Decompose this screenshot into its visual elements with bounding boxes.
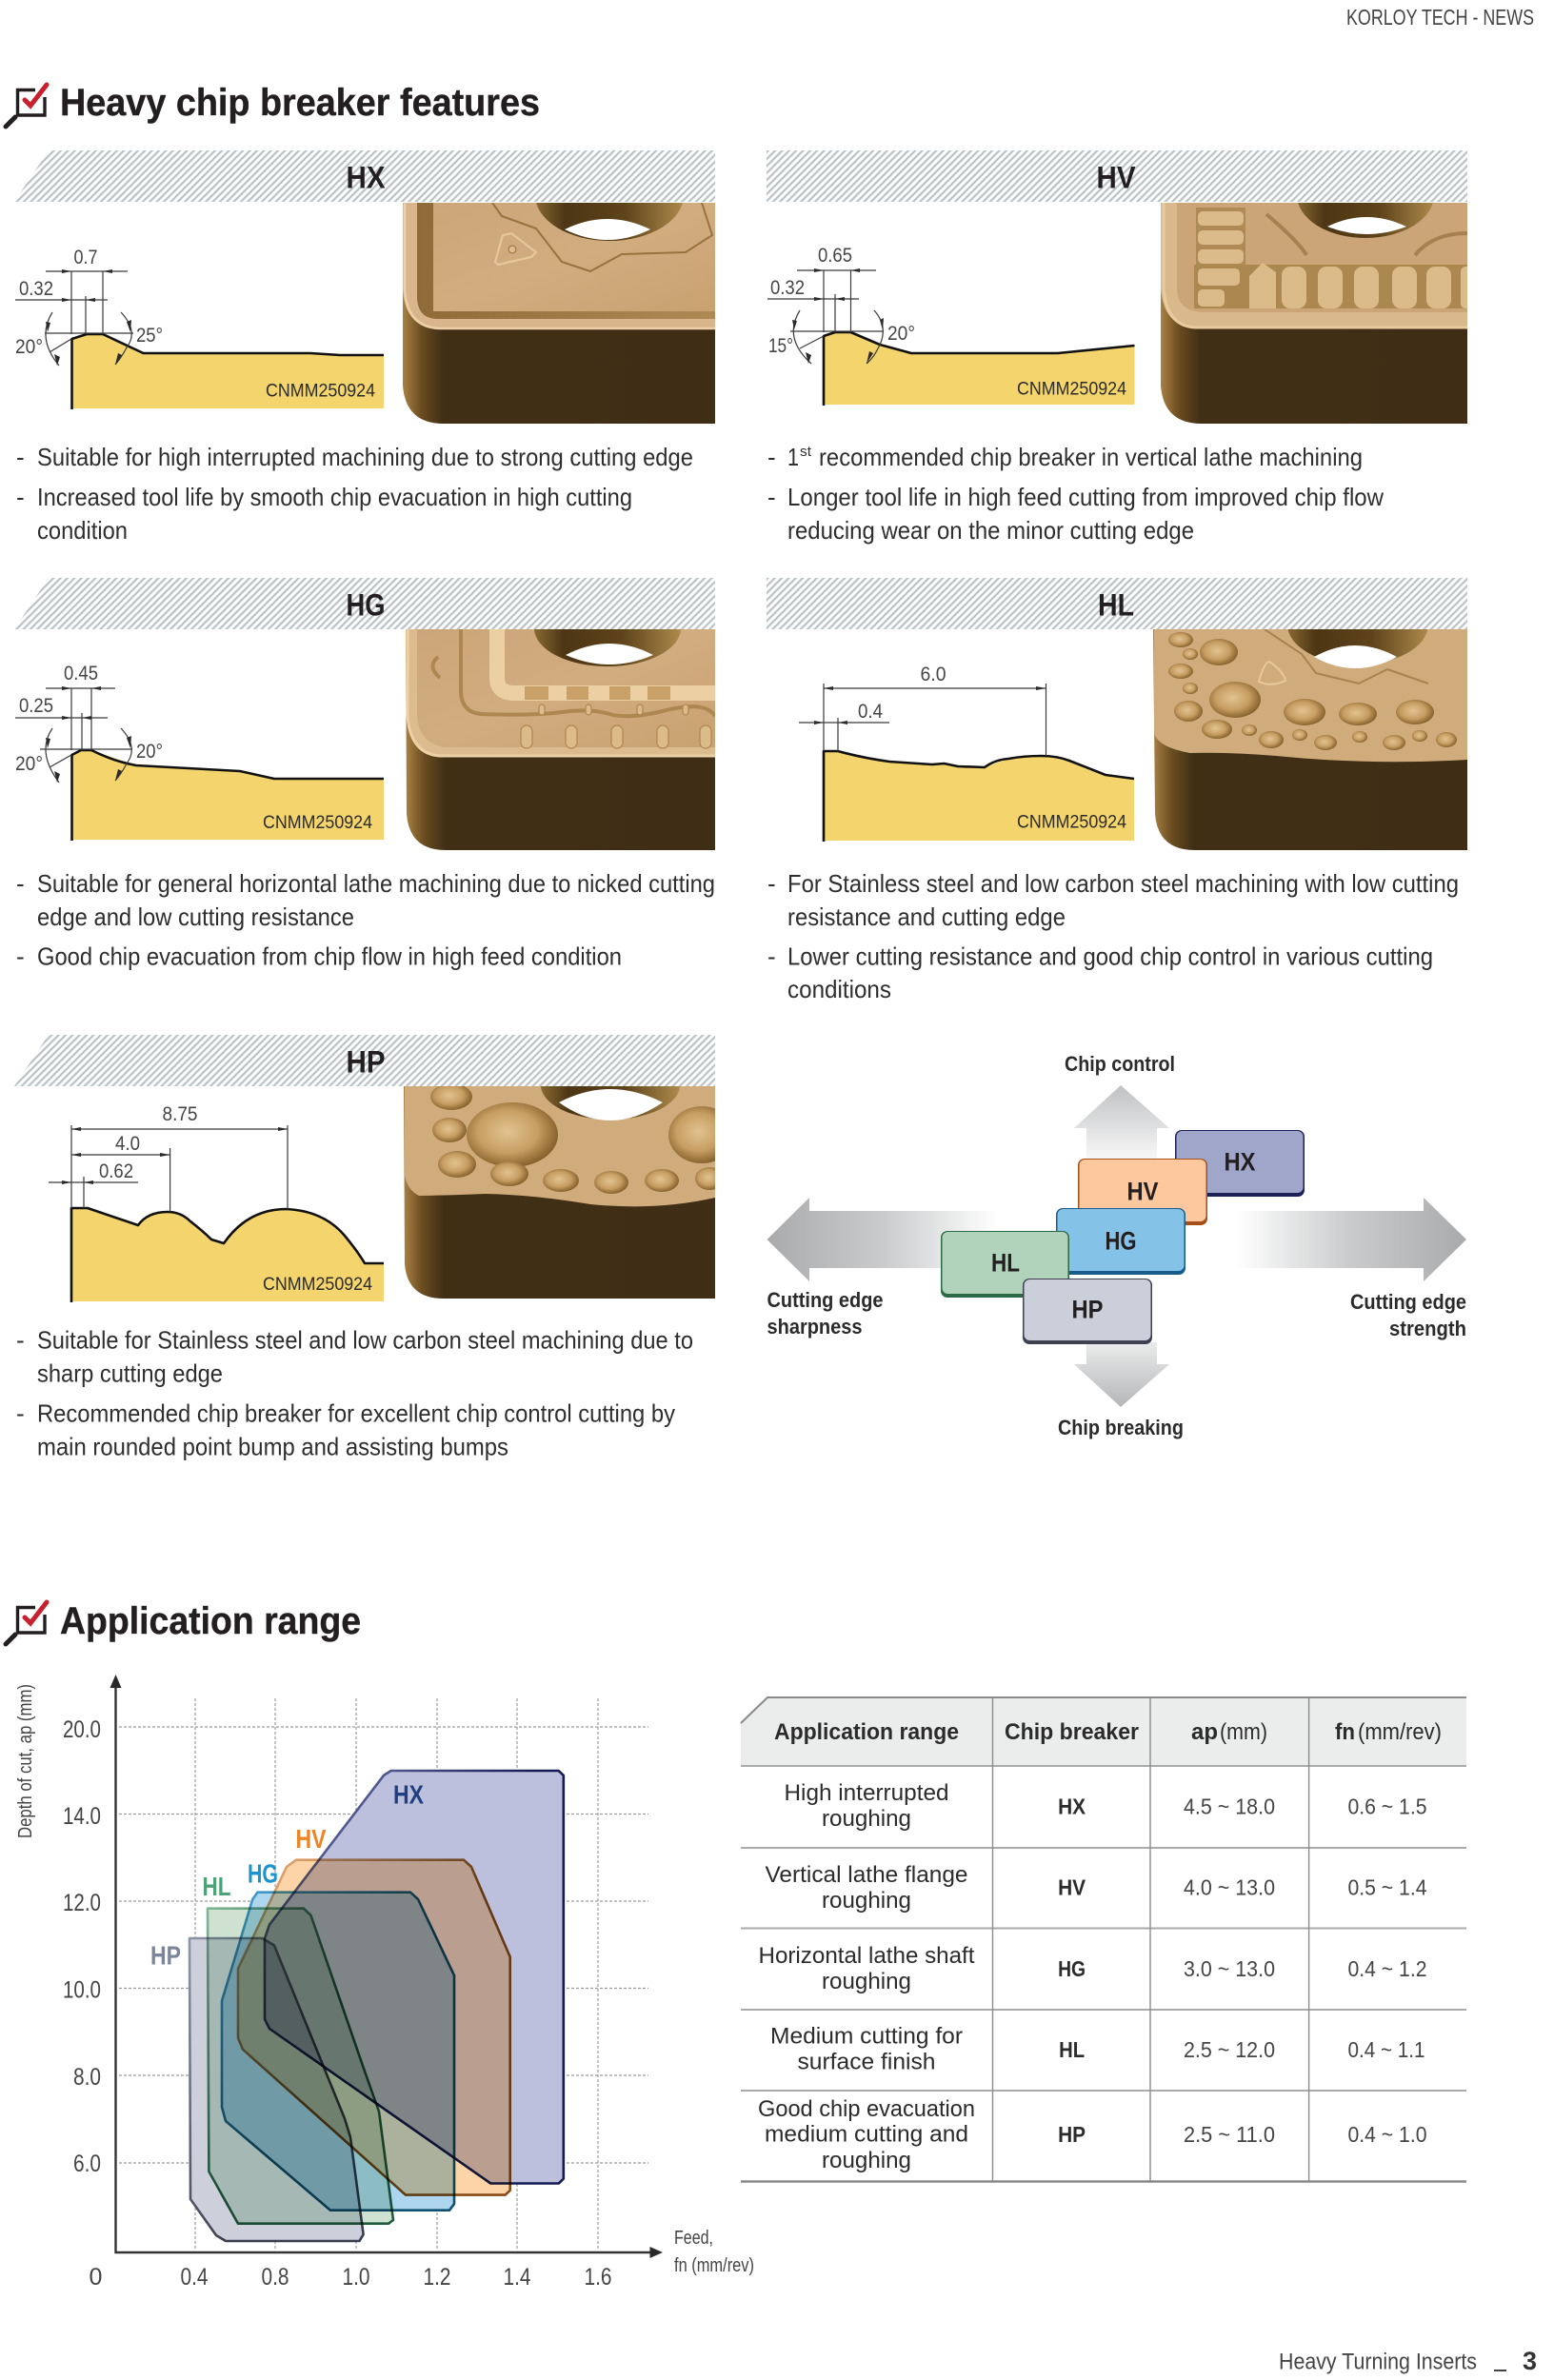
HP bullets xyxy=(16,1325,693,1460)
HV bullets: reducing wear on the minor cutting edge xyxy=(787,516,1194,545)
row: HL xyxy=(770,2024,1424,2075)
y axis labels: 10.0 xyxy=(63,1976,101,2003)
table header xyxy=(741,1697,1466,1766)
x axis labels: 1.4 xyxy=(503,2264,531,2291)
series labels: HL xyxy=(202,1872,230,1901)
HG bullets: Suitable for general horizontal lathe machining due to nicked cutting xyxy=(37,869,715,898)
HP bullets: Suitable for Stainless steel and low carbon steel machining due to xyxy=(37,1325,693,1354)
HP edge profile diagram: 4.0 xyxy=(115,1133,140,1155)
table header: Chip breaker xyxy=(1005,1719,1139,1745)
HP bullets: sharp cutting edge xyxy=(37,1359,223,1388)
icon: magnifier checkbox xyxy=(6,1602,47,1644)
series labels: HX xyxy=(393,1780,424,1809)
HX edge profile diagram: 0.7 xyxy=(74,247,97,268)
row: HG: HG xyxy=(1058,1956,1086,1981)
HG edge profile diagram xyxy=(15,663,384,841)
x axis title xyxy=(674,2228,754,2276)
HX bullets xyxy=(16,443,693,545)
x axis labels: 1.0 xyxy=(343,2264,369,2291)
label: chip breaking: Chip breaking xyxy=(1058,1416,1184,1439)
range: HV xyxy=(238,1860,510,2195)
panel: positioning diagram xyxy=(767,1052,1466,1439)
HV edge profile diagram: CNMM250924 xyxy=(1017,379,1126,400)
range: HL xyxy=(208,1909,393,2224)
x axis labels xyxy=(90,2264,611,2291)
HV band xyxy=(767,150,1467,202)
y axis labels xyxy=(63,1716,101,2177)
HP band xyxy=(14,1035,715,1086)
HV edge profile diagram xyxy=(767,245,1135,406)
HX edge profile diagram: CNMM250924 xyxy=(266,381,375,402)
HV bullets: - xyxy=(767,483,776,511)
section heading: features xyxy=(6,82,540,127)
range polygons xyxy=(189,1771,564,2241)
HX edge profile diagram xyxy=(15,247,384,409)
series labels xyxy=(150,1780,424,1971)
x axis labels: 1.6 xyxy=(585,2264,611,2291)
box: HV xyxy=(1078,1159,1207,1225)
HP edge profile diagram: CNMM250924 xyxy=(263,1275,372,1295)
x axis labels: 1.2 xyxy=(423,2264,451,2291)
footer: Heavy Turning Inserts xyxy=(1279,2350,1477,2374)
HL edge profile diagram: 0.4 xyxy=(858,701,883,723)
HL bullets: resistance and cutting edge xyxy=(787,902,1066,931)
panel: HV xyxy=(767,150,1472,545)
HX edge profile diagram: 25° xyxy=(136,325,163,347)
y axis labels: 8.0 xyxy=(73,2064,101,2091)
range: HP xyxy=(189,1938,364,2241)
HG insert illustration xyxy=(406,629,715,850)
row: HL: surface finish xyxy=(798,2049,935,2075)
HP insert illustration xyxy=(404,1086,715,1299)
y axis labels: 20.0 xyxy=(63,1716,101,1743)
row: HX: 0.6 ~ 1.5 xyxy=(1348,1794,1426,1818)
row: HL: HL xyxy=(1059,2037,1085,2062)
HL insert illustration xyxy=(1153,629,1467,850)
box: HL: HL xyxy=(991,1249,1020,1278)
HL edge profile diagram: 6.0 xyxy=(920,664,946,685)
arrow: right xyxy=(1236,1198,1466,1281)
range: HX xyxy=(265,1771,564,2184)
row: HV: roughing xyxy=(822,1888,911,1914)
HV bullets: 1 xyxy=(787,443,799,471)
row: HX: High interrupted xyxy=(785,1780,948,1806)
HL bullets xyxy=(767,869,1459,1003)
row: HG: Horizontal lathe shaft xyxy=(758,1943,975,1969)
HL bullets: - xyxy=(767,942,776,971)
box: HP xyxy=(1023,1279,1152,1344)
arrow: down xyxy=(1074,1342,1169,1407)
HP bullets: - xyxy=(16,1399,25,1428)
x axis labels: 0 xyxy=(90,2264,102,2291)
row: HV: HV xyxy=(1058,1875,1086,1900)
row: HV: 4.0 ~ 13.0 xyxy=(1184,1875,1275,1900)
HX band: HX xyxy=(347,160,386,194)
title: Application range xyxy=(60,1600,361,1642)
HX bullets: condition xyxy=(37,516,128,545)
HG edge profile diagram: CNMM250924 xyxy=(263,813,372,833)
HX band xyxy=(14,150,715,202)
HP bullets: main rounded point bump and assisting bumps xyxy=(37,1432,508,1460)
HV bullets xyxy=(767,443,1384,545)
HG band xyxy=(14,578,715,629)
x axis labels: 0.8 xyxy=(261,2264,289,2291)
HG band: HG xyxy=(347,588,385,623)
range: HG xyxy=(222,1893,454,2211)
HL band: HL xyxy=(1098,588,1134,623)
row: HV xyxy=(766,1862,1427,1914)
row: HP: roughing xyxy=(822,2148,911,2173)
HG bullets: Good chip evacuation from chip flow in high feed condition xyxy=(37,942,622,971)
HV edge profile diagram: 15° xyxy=(768,335,793,357)
panel: HX xyxy=(14,149,715,545)
row: HP: HP xyxy=(1058,2122,1086,2147)
HV edge profile diagram: 20° xyxy=(887,323,915,345)
table header: (mm/rev) xyxy=(1358,1719,1442,1745)
panel: HL xyxy=(767,578,1467,1003)
panel: HG xyxy=(14,578,715,971)
series labels: HG xyxy=(248,1858,278,1889)
table header: ap xyxy=(1191,1719,1218,1745)
row: HV: Vertical lathe flange xyxy=(766,1862,967,1888)
series labels: HV xyxy=(295,1824,327,1854)
box: HV: HV xyxy=(1127,1177,1158,1205)
y axis and x axis xyxy=(110,1675,663,2258)
box: HL xyxy=(941,1231,1069,1298)
table header: Application range xyxy=(774,1719,959,1745)
HL bullets: conditions xyxy=(787,975,891,1003)
HV band: HV xyxy=(1097,160,1136,194)
y axis title: Depth of cut, ap (mm) xyxy=(15,1684,36,1838)
HG bullets: - xyxy=(16,942,25,971)
y axis labels: 14.0 xyxy=(63,1803,101,1830)
arrow: up xyxy=(1074,1085,1169,1160)
HX bullets: Suitable for high interrupted machining due to strong cutting edge xyxy=(37,443,693,471)
y axis labels: 12.0 xyxy=(63,1890,101,1916)
HP edge profile diagram xyxy=(49,1103,384,1302)
box: HG: HG xyxy=(1105,1226,1137,1255)
HX insert illustration xyxy=(403,203,715,424)
label: cutting edge sharpness: Cutting edge xyxy=(767,1288,884,1312)
box: HG xyxy=(1056,1208,1185,1275)
HV insert illustration xyxy=(1161,203,1467,424)
HV edge profile diagram: 0.32 xyxy=(770,277,805,299)
label: cutting edge strength: strength xyxy=(1389,1317,1466,1340)
row: HV: 0.5 ~ 1.4 xyxy=(1348,1875,1427,1900)
label: cutting edge strength: Cutting edge xyxy=(1350,1290,1466,1314)
HG edge profile diagram: 0.45 xyxy=(64,663,98,684)
series labels: HP xyxy=(150,1940,181,1971)
row: HP: Good chip evacuation xyxy=(758,2096,975,2122)
title: Heavy chip breaker features xyxy=(60,82,540,124)
HV edge profile diagram: 0.65 xyxy=(818,245,852,267)
HP bullets: Recommended chip breaker for excellent chip control cutting by xyxy=(37,1399,675,1428)
HP bullets: - xyxy=(16,1325,25,1354)
row: HP xyxy=(758,2096,1426,2173)
row: HX: 4.5 ~ 18.0 xyxy=(1184,1794,1275,1818)
HL edge profile diagram: CNMM250924 xyxy=(1017,813,1126,832)
HL band xyxy=(767,578,1467,629)
y axis labels: 6.0 xyxy=(73,2151,101,2177)
row: HX xyxy=(785,1780,1426,1832)
HX edge profile diagram: 20° xyxy=(15,336,43,358)
x axis title: fn (mm/rev) xyxy=(674,2255,754,2276)
icon: magnifier checkbox xyxy=(6,85,47,127)
HV bullets: st xyxy=(800,444,812,460)
HG bullets: - xyxy=(16,869,25,898)
panel: HP xyxy=(14,1035,735,1460)
row: HG: 0.4 ~ 1.2 xyxy=(1348,1956,1426,1981)
row: HG: 3.0 ~ 13.0 xyxy=(1184,1956,1275,1981)
label: cutting edge sharpness xyxy=(767,1288,884,1339)
table: application range xyxy=(741,1697,1466,2182)
HV bullets: Longer tool life in high feed cutting from improved chip flow xyxy=(787,483,1384,511)
HL bullets: For Stainless steel and low carbon steel machining with low cutting xyxy=(787,869,1459,898)
HX bullets: Increased tool life by smooth chip evacuation in high cutting xyxy=(37,483,632,511)
row: HP: 0.4 ~ 1.0 xyxy=(1348,2122,1426,2147)
row: HP: medium cutting and xyxy=(765,2121,968,2148)
row: HG: roughing xyxy=(822,1969,911,1994)
HG edge profile diagram: 20° xyxy=(136,741,163,763)
chart: application range xyxy=(15,1675,754,2291)
HL edge profile diagram xyxy=(799,664,1134,842)
arrow: left xyxy=(767,1198,998,1281)
section heading: application range xyxy=(6,1600,361,1644)
HV bullets: - xyxy=(767,443,776,471)
HX bullets: - xyxy=(16,483,25,511)
HG bullets: edge and low cutting resistance xyxy=(37,902,354,931)
HX edge profile diagram: 0.32 xyxy=(19,278,53,300)
box: HX xyxy=(1175,1130,1305,1197)
HL bullets: Lower cutting resistance and good chip control in various cutting xyxy=(787,942,1433,971)
row: HP: 2.5 ~ 11.0 xyxy=(1184,2122,1275,2147)
HP edge profile diagram: 0.62 xyxy=(99,1160,133,1182)
HX bullets: - xyxy=(16,443,25,471)
row: HL: 2.5 ~ 12.0 xyxy=(1184,2037,1275,2062)
HP band: HP xyxy=(347,1045,385,1080)
HV bullets: recommended chip breaker in vertical lathe machining xyxy=(819,443,1363,471)
label: chip control: Chip control xyxy=(1065,1052,1175,1076)
row: HL: 0.4 ~ 1.1 xyxy=(1348,2037,1424,2062)
HP edge profile diagram: 8.75 xyxy=(162,1103,198,1125)
HG bullets xyxy=(16,869,715,971)
table header: fn xyxy=(1335,1719,1355,1745)
row: HX: roughing xyxy=(822,1806,911,1832)
HG edge profile diagram: 0.25 xyxy=(19,695,53,717)
HG edge profile diagram: 20° xyxy=(15,753,43,775)
footer: 3 xyxy=(1523,2347,1537,2375)
row: HL: Medium cutting for xyxy=(770,2024,963,2049)
box: HP: HP xyxy=(1072,1295,1103,1323)
x axis title: Feed, xyxy=(674,2228,713,2249)
label: cutting edge strength xyxy=(1350,1290,1466,1340)
row: HG xyxy=(758,1943,1426,1994)
row: HX: HX xyxy=(1058,1794,1086,1818)
table header: (mm) xyxy=(1220,1719,1267,1745)
HL bullets: - xyxy=(767,869,776,898)
box: HX: HX xyxy=(1225,1148,1255,1177)
label: cutting edge sharpness: sharpness xyxy=(767,1315,863,1339)
x axis labels: 0.4 xyxy=(181,2264,209,2291)
